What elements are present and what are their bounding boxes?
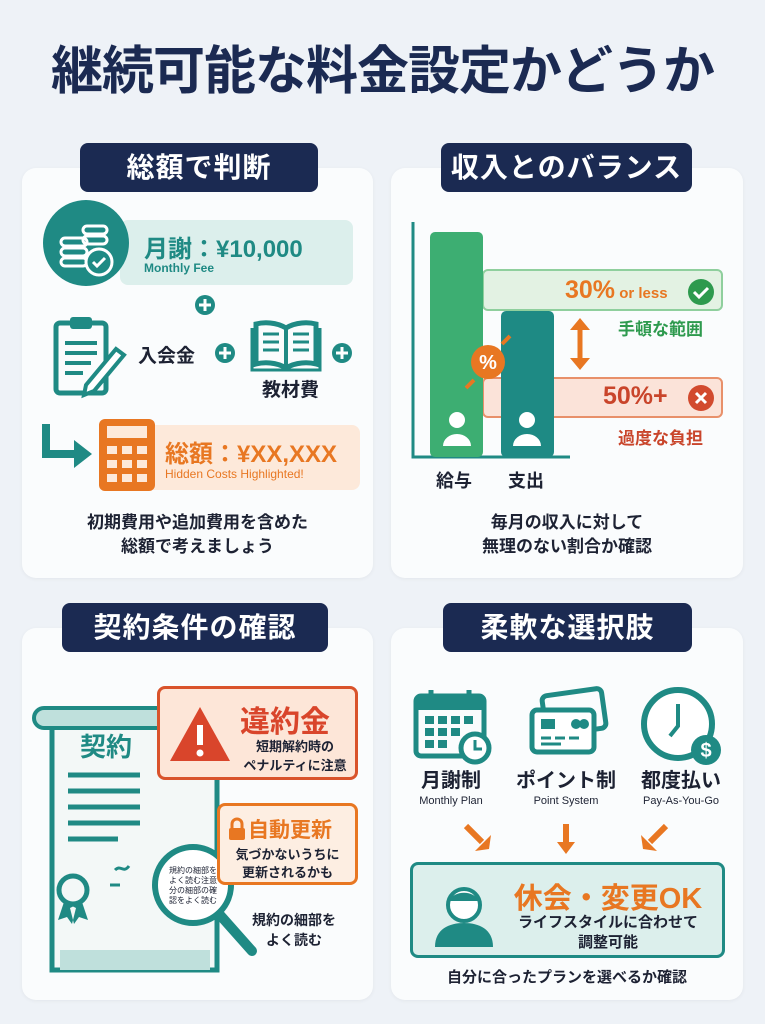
magnifier text: 規約の細部を bbox=[169, 866, 217, 875]
callout: pause/change OK: 休会・変更OK bbox=[514, 883, 702, 915]
monthly fee box: 月謝：¥10,000 bbox=[144, 236, 303, 263]
magnifier text: 認をよく読む bbox=[169, 896, 217, 905]
icon: clock with dollar bbox=[641, 687, 721, 765]
heading: 収入とのバランス: 収入とのバランス bbox=[451, 152, 682, 183]
callout: pause/change OK: 調整可能 bbox=[578, 934, 638, 951]
heading: 総額で判断: 総額で判断 bbox=[126, 152, 272, 183]
total box: Hidden Costs Highlighted! bbox=[165, 467, 304, 481]
heading: 契約条件の確認: 契約条件の確認 bbox=[93, 612, 296, 643]
panel: income balance bbox=[391, 168, 743, 578]
total box bbox=[140, 425, 360, 490]
panel: flexible options bbox=[391, 628, 743, 1000]
caption: flexible: 自分に合ったプランを選べるか確認 bbox=[447, 969, 687, 986]
caption: total: 総額で考えましょう bbox=[121, 537, 274, 556]
text: 規約の細部を: 規約の細部を bbox=[252, 912, 336, 928]
heading: 契約条件の確認 bbox=[62, 603, 328, 652]
monthly fee box bbox=[120, 220, 353, 285]
title: 継続可能な料金設定かどうか bbox=[51, 43, 714, 101]
callout: auto renewal bbox=[217, 803, 358, 885]
text: 支出 bbox=[508, 471, 544, 491]
magnifier text: 分の細部の確 bbox=[169, 886, 217, 895]
icon: coins bbox=[43, 200, 129, 286]
magnifier text bbox=[169, 866, 217, 905]
text: 規約の細部を bbox=[252, 912, 336, 948]
text: 手頓な範囲: 手頓な範囲 bbox=[618, 320, 703, 339]
panel: contract bbox=[22, 628, 373, 1000]
plan labels: 月謝制 bbox=[421, 770, 481, 792]
heading: 柔軟な選択肢: 柔軟な選択肢 bbox=[480, 612, 654, 643]
bar labels: 給与 bbox=[436, 471, 472, 491]
text: ポイント制 bbox=[516, 770, 616, 792]
caption: balance: 毎月の収入に対して bbox=[491, 513, 643, 532]
callout: penalty: 違約金 bbox=[240, 706, 330, 739]
text: 都度払い bbox=[641, 770, 721, 792]
callout: penalty: ペナルティに注意 bbox=[243, 758, 347, 773]
plan labels bbox=[419, 770, 483, 807]
text: 50%+: 50%+ bbox=[603, 382, 668, 410]
text: 契約: 契約 bbox=[80, 732, 132, 762]
magnifier text: よく読む注意 bbox=[169, 876, 217, 885]
monthly fee box: Monthly Fee bbox=[144, 261, 214, 275]
callout: auto renewal: 自動更新 bbox=[248, 819, 332, 842]
heading: 収入とのバランス bbox=[441, 143, 692, 192]
plan labels: Monthly Plan bbox=[419, 795, 483, 807]
callout: penalty: 短期解約時の bbox=[256, 739, 334, 754]
text: Point System bbox=[534, 795, 598, 807]
icon: calculator bbox=[99, 419, 155, 491]
arrow: result bbox=[42, 424, 92, 468]
text: 入会金: 入会金 bbox=[138, 346, 195, 367]
text: 教材費: 教材費 bbox=[262, 380, 319, 401]
heading: 総額で判断 bbox=[80, 143, 318, 192]
callout: auto renewal: 気づかないうちに bbox=[235, 847, 340, 862]
text: 規約の細部を: よく読む bbox=[266, 932, 322, 948]
panel: total amount bbox=[22, 168, 373, 578]
icon: clock with dollar: $ bbox=[700, 740, 712, 762]
text: 過度な負担: 過度な負担 bbox=[618, 429, 703, 448]
icon: calendar bbox=[414, 690, 492, 764]
text: 30% or less: 30% or less bbox=[565, 276, 668, 304]
caption: balance: 無理のない割合か確認 bbox=[482, 537, 652, 556]
icon: book bbox=[250, 320, 322, 372]
callout: pause/change OK bbox=[410, 862, 725, 958]
icon: card bbox=[530, 686, 608, 754]
bar chart: income vs expense: % bbox=[479, 352, 497, 374]
text: Pay-As-You-Go bbox=[643, 795, 719, 807]
callout: auto renewal: 更新されるかも bbox=[242, 865, 333, 880]
icon: clipboard bbox=[54, 317, 127, 398]
callout: penalty bbox=[157, 686, 358, 780]
caption: total bbox=[87, 513, 308, 556]
heading: 柔軟な選択肢 bbox=[443, 603, 692, 652]
total box: 総額：¥XX,XXX bbox=[165, 441, 337, 468]
caption: balance bbox=[482, 513, 652, 556]
caption: total: 初期費用や追加費用を含めた bbox=[87, 513, 308, 532]
callout: pause/change OK: ライフスタイルに合わせて bbox=[518, 914, 698, 931]
